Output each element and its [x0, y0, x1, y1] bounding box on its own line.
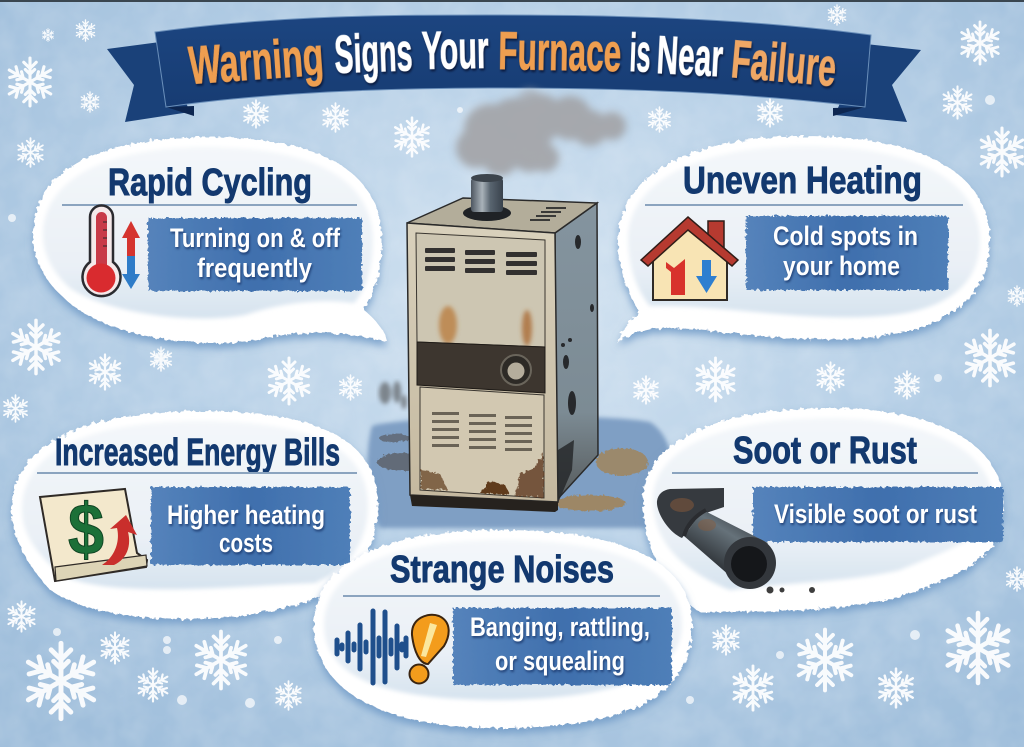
label text [470, 612, 650, 676]
lower vents [432, 412, 532, 451]
heading: Uneven Heating [683, 160, 922, 202]
icon: bill with rising arrow [40, 489, 147, 581]
snow bubble [314, 530, 692, 728]
heading: Rapid Cycling [108, 162, 312, 204]
title text: Signs [333, 22, 413, 85]
furnace [407, 174, 598, 512]
smoke [456, 89, 626, 176]
label text: costs [219, 528, 273, 558]
panel: increased energy bills [12, 411, 378, 619]
title text [187, 20, 839, 98]
banner right tail [835, 44, 921, 122]
control band [417, 342, 545, 393]
snow bubble [33, 137, 388, 343]
label text: Turning on & off [170, 223, 341, 253]
lower panel [420, 387, 544, 498]
title text: Your [421, 20, 489, 81]
dial [501, 355, 531, 385]
rust streaks [439, 306, 532, 346]
label box [753, 487, 1003, 542]
chimney base [463, 205, 511, 221]
label box [746, 216, 948, 290]
title text: Near [655, 25, 724, 88]
label text: Banging, rattling, [470, 612, 650, 642]
label box [148, 218, 362, 291]
heading: Increased Energy Bills [55, 432, 340, 474]
snow bubble [643, 408, 1003, 612]
label text [773, 221, 918, 281]
icon: rusty pipe [657, 488, 815, 594]
banner ribbon [155, 15, 871, 107]
rust bottom [421, 452, 544, 497]
label text: frequently [197, 253, 312, 283]
label text: or squealing [495, 646, 625, 676]
ground patch with soot [367, 381, 672, 528]
title text: is [629, 23, 652, 84]
label text [170, 223, 341, 283]
snow bubble [12, 411, 378, 619]
snow bubble [617, 136, 990, 343]
label box [453, 608, 672, 685]
label text: Higher heating [167, 500, 325, 530]
heading: Soot or Rust [733, 430, 917, 472]
icon: exclamation [410, 615, 449, 684]
title text: Warning [187, 27, 326, 96]
small soot puff [379, 381, 407, 409]
label text: your home [783, 251, 900, 281]
upper panel [416, 233, 545, 347]
label text: Cold spots in [773, 221, 918, 251]
label text [167, 500, 325, 558]
chimney [471, 174, 503, 212]
title text: Furnace [498, 21, 622, 83]
panel: strange noises [314, 530, 692, 728]
icon: up and down arrows [122, 221, 140, 289]
furnace top [407, 198, 597, 233]
icon: thermometer [83, 206, 120, 296]
furnace side [555, 203, 598, 502]
banner left tail [107, 42, 190, 122]
icon: sound wave [337, 611, 406, 683]
panel: soot or rust [643, 408, 1003, 612]
panel: rapid cycling [33, 137, 388, 343]
panel: uneven heating [617, 136, 990, 343]
icon: house [641, 217, 738, 300]
upper vents [425, 248, 537, 275]
label box [151, 487, 350, 565]
heading: Strange Noises [390, 549, 614, 591]
title text: Failure [729, 29, 839, 98]
icon: bill with rising arrow: $ [68, 490, 104, 570]
furnace front [407, 223, 558, 502]
label text: Visible soot or rust [774, 499, 977, 529]
title banner [107, 15, 921, 122]
